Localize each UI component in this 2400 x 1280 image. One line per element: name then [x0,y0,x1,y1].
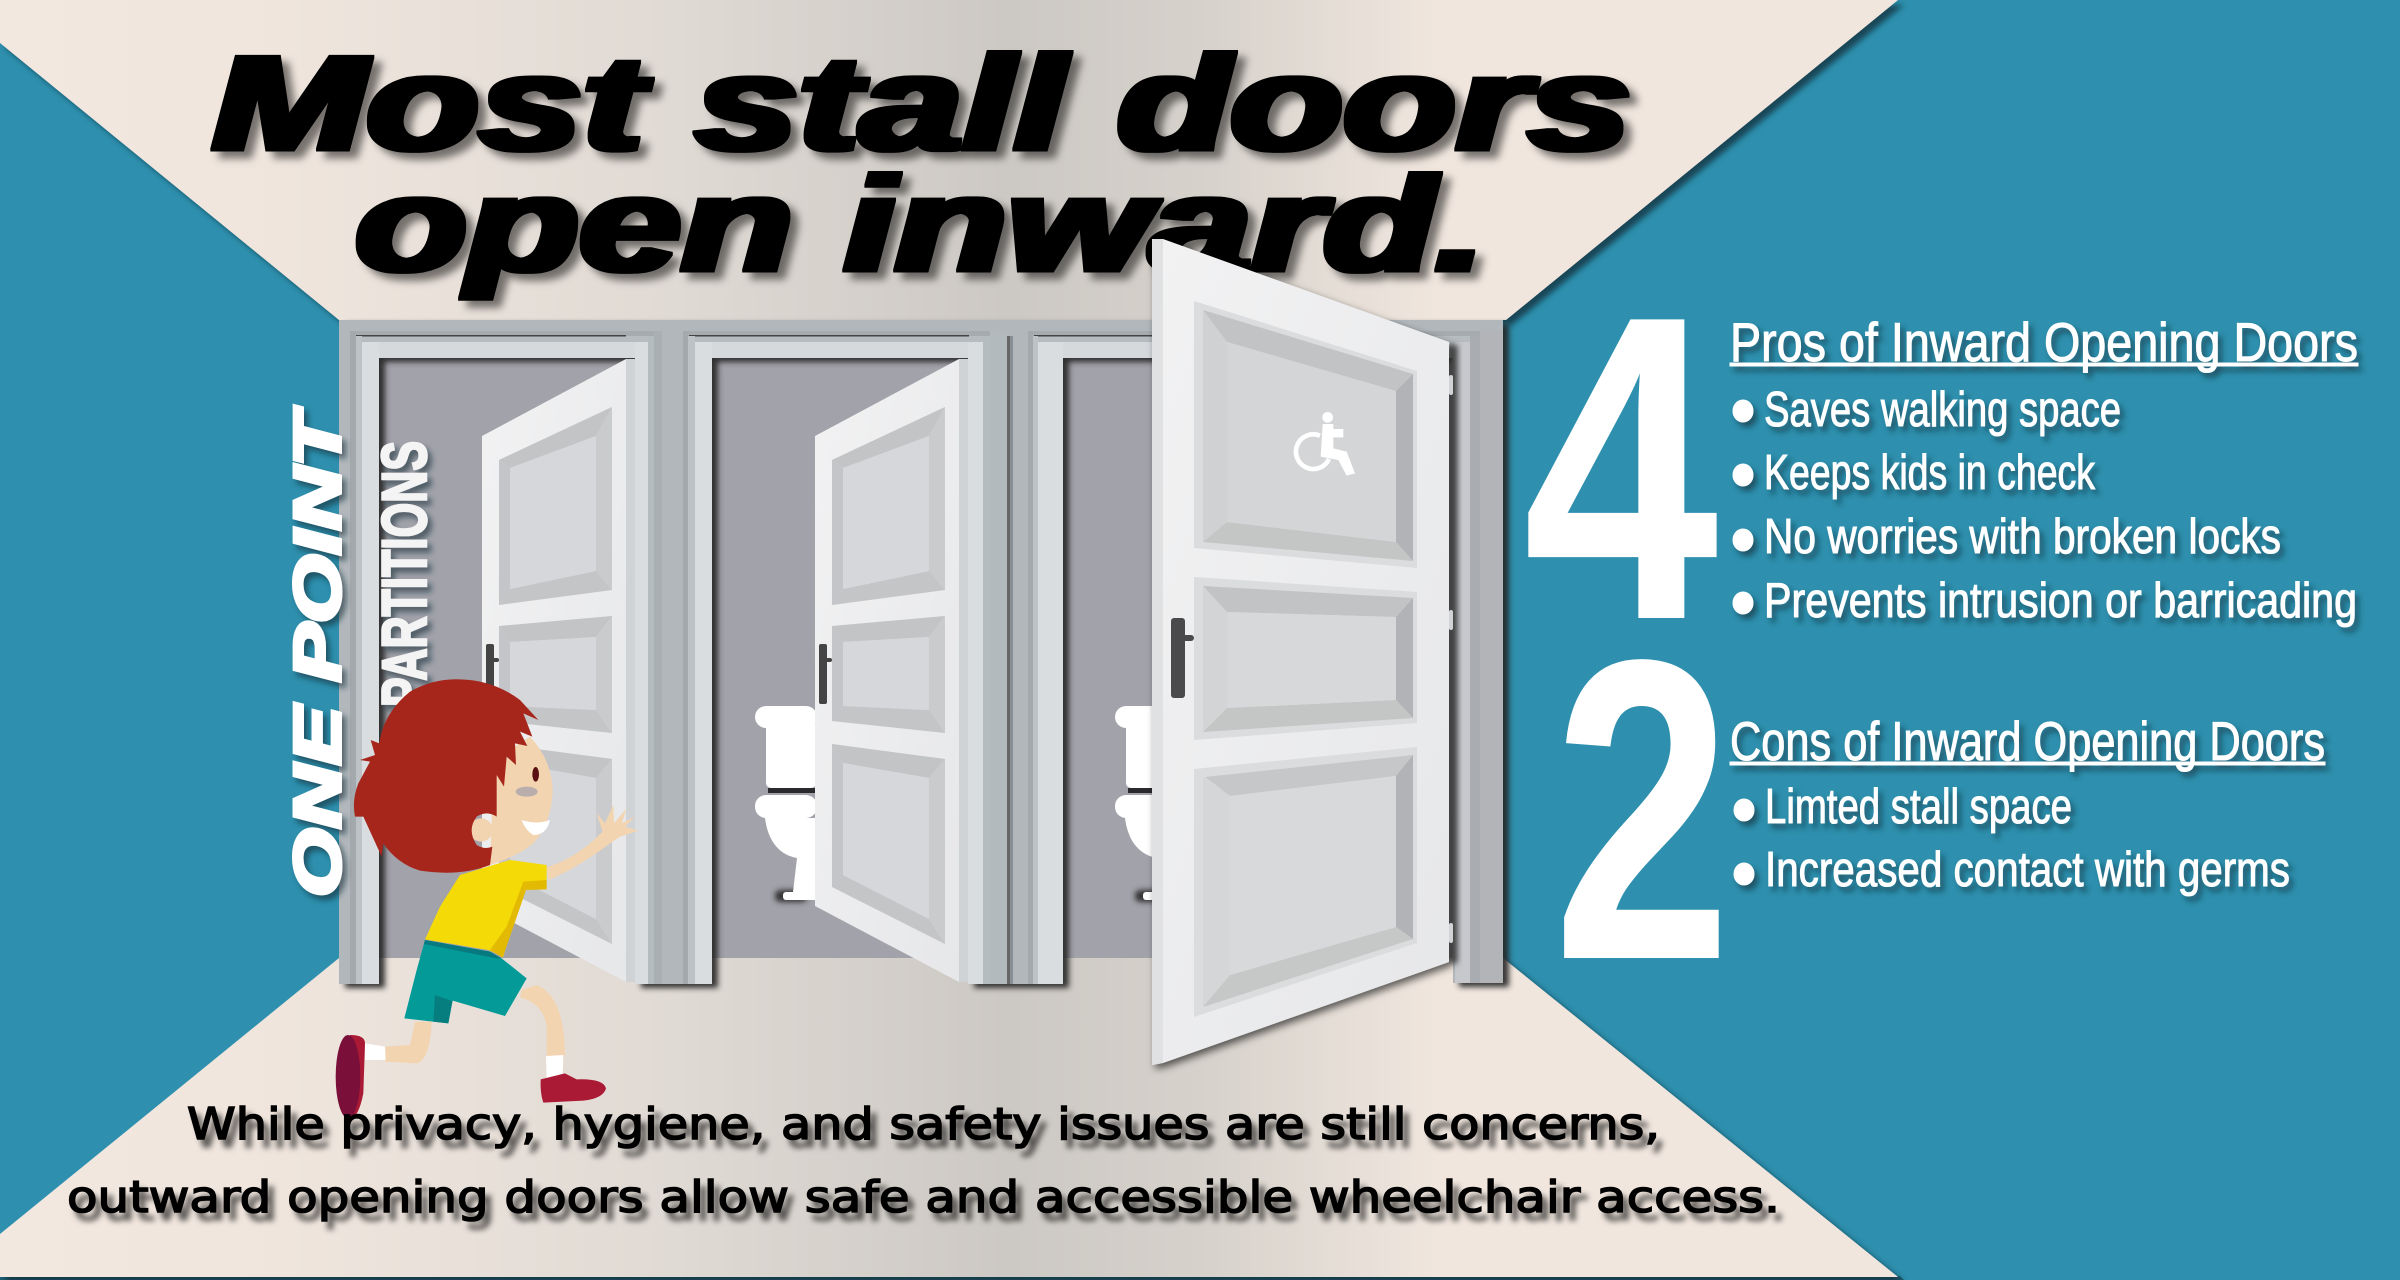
cons list [1730,710,2325,897]
toilet: accessible stall [1115,706,1167,902]
title: open inward. [355,148,1486,300]
footer statement: outward opening doors allow safe and accessible wheelchair access. [67,1172,1780,1223]
socks [365,1043,563,1080]
arm and hand [547,805,638,880]
eye [532,767,539,782]
shirt [425,860,547,957]
hair [354,679,538,873]
rear leg [385,1022,432,1063]
floor panel [0,958,1898,1277]
pro: saves walking space: Saves walking space [1764,383,2121,437]
con: limited stall space: Limted stall space [1765,780,2072,834]
pro: no worries with broken locks: No worries with broken locks [1764,510,2281,564]
head [490,737,553,865]
upper door panel [1194,301,1417,568]
pros list [1730,311,2358,628]
hinges [1449,375,1453,943]
door handle [1171,618,1194,698]
cheek [516,787,538,797]
stall back wall [339,320,1503,958]
PARTITIONS wordmark: PARTITIONS [370,441,440,707]
middle door panel [1194,577,1417,740]
front shoe [541,1073,606,1103]
floor base strip [0,1276,1904,1280]
icon: wheelchair accessibility symbol [1296,412,1355,476]
pro: keeps kids in check: Keeps kids in check [1764,446,2095,500]
footer statement [67,1099,1780,1223]
title: Most stall doors [212,27,1631,179]
front leg [520,985,565,1057]
title [212,27,1631,300]
smile [522,820,550,835]
ear [469,818,493,842]
footer statement: While privacy, hygiene, and safety issues are still concerns, [187,1099,1660,1150]
big number 4: 4 [1523,225,1721,710]
shorts [404,940,527,1023]
ceiling panel [0,0,1898,320]
rear shoe [350,1035,365,1118]
con: increased contact with germs: Increased contact with germs [1765,843,2290,897]
brand logo: ONE POINT PARTITIONS [280,407,440,897]
open door: middle stall [815,359,968,982]
large accessible door opening outward [1152,239,1458,1065]
big number 2: 2 [1553,572,1732,1050]
toilet: middle stall [755,706,817,902]
ONE POINT wordmark: ONE POINT [280,407,354,897]
open door: first stall [482,359,635,982]
lower door panel [1194,747,1417,1017]
stall door frames [339,320,1503,984]
boy running toward door [336,679,638,1118]
